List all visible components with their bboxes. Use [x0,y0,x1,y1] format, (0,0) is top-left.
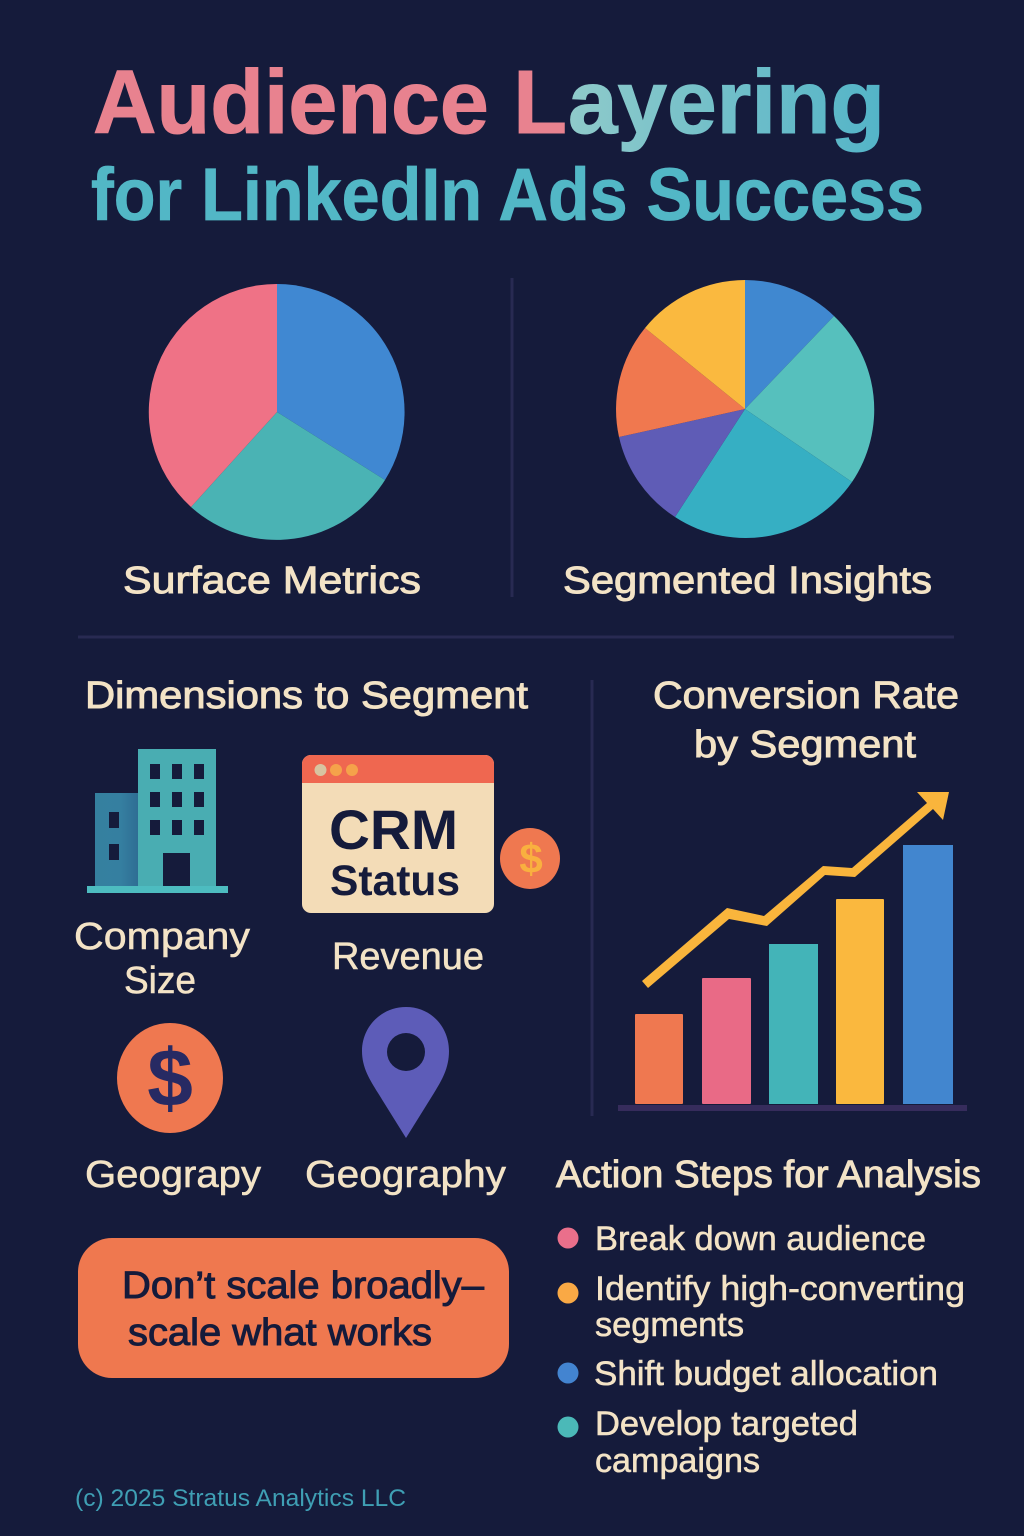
heading: conversion rate by segment: by Segment [694,724,916,766]
icon: company building [87,749,228,893]
icon: small dollar coin [500,828,560,889]
title: for LinkedIn Ads Success [91,153,924,236]
heading: action steps: Action Steps for Analysis [556,1154,981,1196]
title: ayering [568,53,885,153]
label: company size: Company [74,916,250,958]
heading: conversion rate by segment [653,675,959,766]
copyright: (c) 2025 Stratus Analytics LLC [75,1485,406,1512]
label: company size: Size [124,960,196,1002]
callout: don't scale broadly [78,1238,509,1378]
step 2: segments [595,1306,744,1344]
icon: large dollar coin [117,1023,223,1133]
icon: CRM status window [302,755,494,913]
icon: large dollar coin: $ [147,1033,193,1124]
icon: small dollar coin: $ [519,835,543,882]
divider lines [78,278,954,1116]
label: surface metrics: Surface Metrics [123,560,421,602]
label: geography: Geography [305,1154,506,1196]
step 3: Shift budget allocation [594,1355,938,1393]
step 2: Identify high-converting [595,1270,965,1308]
title: Audience L [93,53,567,153]
action list [558,1220,965,1480]
heading: dimensions to segment: Dimensions to Segment [85,675,528,717]
step 4: campaigns [595,1442,760,1480]
callout: don't scale broadly: Don’t scale broadly– [122,1265,485,1307]
label: segmented insights: Segmented Insights [563,560,932,602]
label: company size [74,916,250,1002]
callout: don't scale broadly: scale what works [128,1312,432,1354]
icon: CRM status window: Status [330,857,460,905]
label: geograpy: Geograpy [85,1154,261,1196]
bar chart: conversion rate [618,845,967,1111]
pie chart: surface metrics [149,284,405,540]
icon: CRM status window: CRM [329,798,458,861]
step 2 [558,1270,965,1344]
title [91,53,924,236]
arrow: upward trend [642,792,949,988]
pie chart: segmented insights [616,280,874,538]
step 4 [558,1405,858,1480]
step 4: Develop targeted [595,1405,858,1443]
step 1: Break down audience [595,1220,926,1258]
heading: conversion rate by segment: Conversion Rate [653,675,959,717]
label: revenue: Revenue [332,936,484,978]
icon: location pin [362,1007,449,1138]
